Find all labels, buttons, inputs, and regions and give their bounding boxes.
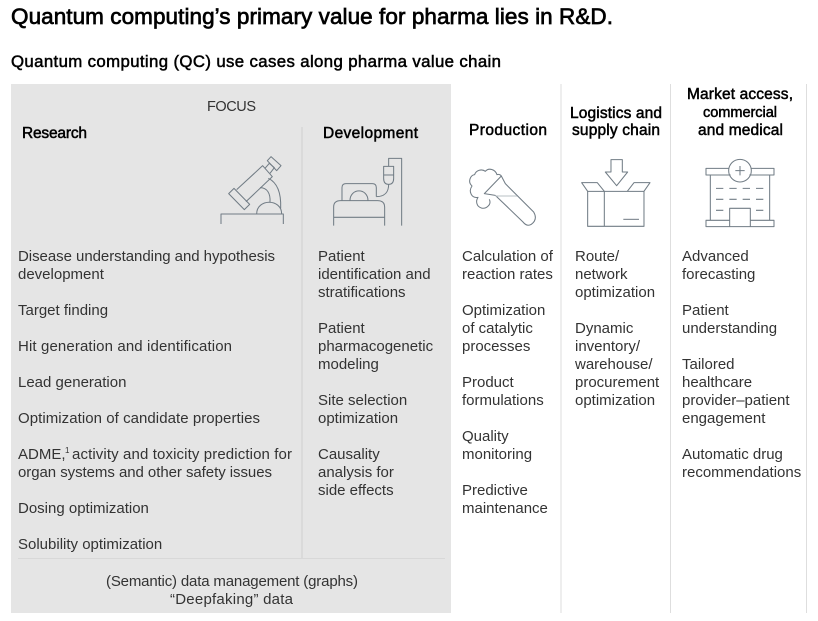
- text: market access use cases: provider–patient: [682, 392, 790, 409]
- heading: logistics and supply chain: [570, 105, 662, 139]
- heading: market access, commercial and medical: Market access,: [687, 86, 793, 103]
- icon: hospital: [706, 159, 774, 227]
- text: research use cases: Dosing optimization: [18, 500, 149, 517]
- text: production use cases: formulations: [462, 392, 544, 409]
- text: logistics use cases: optimization: [575, 392, 655, 409]
- text: development use cases: identification and: [318, 266, 431, 283]
- text: logistics use cases: optimization: [575, 284, 655, 301]
- text: research use cases: Hit generation and identification: [18, 338, 232, 355]
- text: market access use cases: Automatic drug: [682, 446, 783, 463]
- text: logistics use cases: [574, 248, 660, 409]
- text: market access use cases: healthcare: [682, 374, 752, 391]
- text: research use cases: ADME,: [18, 446, 66, 463]
- text: logistics use cases: inventory/: [575, 338, 641, 355]
- icon: patient bed with IV: [334, 158, 402, 226]
- text: development use cases: Patient: [318, 320, 366, 337]
- text: development use cases: pharmacogenetic: [318, 338, 434, 355]
- text: production use cases: Product: [462, 374, 515, 391]
- text: market access use cases: engagement: [682, 410, 766, 427]
- text: production use cases: of catalytic: [462, 320, 533, 337]
- heading: research: Research: [22, 125, 87, 142]
- text: production use cases: [462, 248, 554, 517]
- text: logistics use cases: network: [575, 266, 628, 283]
- text: logistics use cases: Dynamic: [575, 320, 634, 337]
- text: production use cases: reaction rates: [462, 266, 553, 283]
- heading: production: Production: [469, 122, 547, 139]
- icon: microscope: [221, 157, 283, 224]
- text: research use cases: 1: [65, 446, 70, 455]
- text: development use cases: stratifications: [318, 284, 406, 301]
- text: logistics use cases: Route/: [575, 248, 620, 265]
- text: production use cases: monitoring: [462, 446, 532, 463]
- text: research use cases: Solubility optimization: [18, 536, 162, 553]
- text: research use cases: [18, 248, 292, 553]
- text: research use cases: Optimization of candidate properties: [18, 410, 260, 427]
- text: research use cases: activity and toxicity prediction for: [72, 446, 292, 463]
- text: development use cases: modeling: [318, 356, 379, 373]
- focus label: FOCUS: [207, 99, 256, 115]
- text: development use cases: Causality: [318, 446, 380, 463]
- heading: market access, commercial and medical: [687, 86, 793, 139]
- text: market access use cases: Tailored: [682, 356, 735, 373]
- text: production use cases: Optimization: [462, 302, 545, 319]
- text: production use cases: Predictive: [462, 482, 528, 499]
- text: development use cases: optimization: [318, 410, 398, 427]
- text: market access use cases: forecasting: [682, 266, 755, 283]
- text: logistics use cases: procurement: [575, 374, 660, 391]
- subtitle: Quantum computing (QC) use cases along pharma value chain: [11, 52, 501, 71]
- text: market access use cases: understanding: [682, 320, 777, 337]
- text: development use cases: analysis for: [318, 464, 394, 481]
- icon: flask with cloud: [470, 169, 535, 225]
- text: production use cases: Calculation of: [462, 248, 554, 265]
- text: research use cases: development: [18, 266, 105, 283]
- text: market access use cases: Advanced: [682, 248, 749, 265]
- heading: development: Development: [323, 125, 419, 142]
- text: research use cases: organ systems and other safety issues: [18, 464, 272, 481]
- text: market access use cases: recommendations: [682, 464, 801, 481]
- text: production use cases: Quality: [462, 428, 509, 445]
- text: cross-cutting focus items: [106, 573, 358, 608]
- text: production use cases: maintenance: [462, 500, 548, 517]
- text: research use cases: Lead generation: [18, 374, 126, 391]
- text: production use cases: processes: [462, 338, 530, 355]
- panel: focus background: [11, 84, 451, 613]
- icon: box with down arrow: [582, 160, 650, 226]
- heading: logistics and supply chain: supply chain: [572, 122, 660, 139]
- text: research use cases: Target finding: [18, 302, 108, 319]
- heading: logistics and supply chain: Logistics and: [570, 105, 662, 122]
- text: development use cases: Patient: [318, 248, 366, 265]
- text: development use cases: Site selection: [318, 392, 407, 409]
- text: research use cases: Disease understanding and hypothesis: [18, 248, 275, 265]
- text: market access use cases: Patient: [682, 302, 730, 319]
- text: market access use cases: [682, 248, 801, 481]
- heading: market access, commercial and medical: and medical: [698, 122, 783, 139]
- text: cross-cutting focus items: “Deepfaking” data: [170, 591, 294, 608]
- text: development use cases: [318, 248, 434, 499]
- text: cross-cutting focus items: (Semantic) data management (graphs): [106, 573, 358, 590]
- title: Quantum computing’s primary value for pharma lies in R&D.: [11, 4, 613, 29]
- text: logistics use cases: warehouse/: [574, 356, 653, 373]
- heading: market access, commercial and medical: commercial: [703, 105, 777, 121]
- text: development use cases: side effects: [318, 482, 394, 499]
